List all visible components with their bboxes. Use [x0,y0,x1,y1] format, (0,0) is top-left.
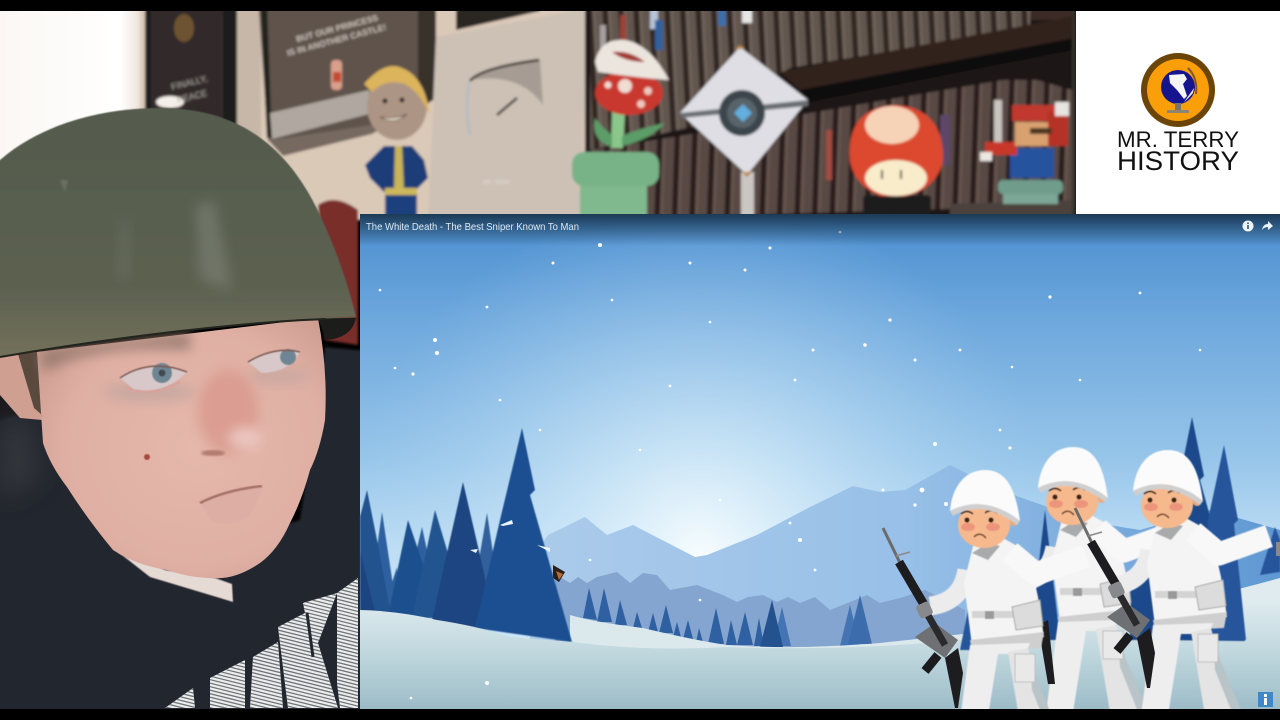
game cartridge shelf [585,0,1076,220]
left poster frame [145,0,237,126]
mario princess poster frame: BUT OUR PRINCESS [295,12,379,44]
top black bar [0,0,1280,11]
face [37,318,326,578]
glowing mushroom lamp [850,105,943,220]
mario princess poster frame: IS IN ANOTHER CASTLE! [286,22,387,58]
soldier two [1018,447,1174,712]
neck and collar [113,548,233,602]
pixel mario figure [980,102,1069,204]
soldier three [1113,450,1269,715]
mario princess poster frame [258,0,436,156]
soldier one rifle [883,528,963,708]
nose tip highlight [228,427,262,449]
small mid trees [583,588,872,647]
vault boy bobblehead [364,66,430,220]
mr terry history logo [1117,53,1239,176]
silver play button plaque: MR. TERRY [483,180,511,186]
animated video panel [360,214,1280,720]
shirt slit [307,613,313,657]
destiny ghost figure [680,45,808,220]
brow shadow [40,332,190,372]
sky [360,214,1280,709]
snowflakes [379,231,1201,699]
snow back hill [570,615,1000,660]
nostril shadow [201,450,225,456]
icon: info circle [1242,220,1254,232]
room background photo [0,0,1076,345]
ear and hair [0,350,42,420]
left poster frame: PEACE [176,88,208,105]
tree snow flecks [470,520,550,553]
shirt shoulder sheen [0,418,40,500]
mouth [200,486,262,524]
right forest [960,417,1280,650]
distant mountains [530,465,1280,660]
hidden sniper helmet [553,565,565,582]
left forest [360,428,572,642]
left eye [120,363,187,391]
white logo panel [1076,11,1280,214]
top video title gradient [360,214,1280,246]
piranha plant plush [572,40,669,220]
jagged distant treeline [555,572,965,650]
soldier one [930,470,1086,720]
person wearing helmet [0,108,390,720]
icon: info card badge [1258,692,1273,707]
dark background behind person [0,340,40,440]
silver play button plaque [428,8,587,220]
soldier three outstretched glove [1276,542,1280,556]
eye socket shadows [104,382,196,402]
bright window and wall [0,0,592,220]
right eye socket shadow [248,368,308,384]
nose [198,370,258,454]
icon: share arrow [1262,221,1273,230]
mr terry history logo: MR. TERRY [1117,127,1239,152]
soldier two rifle stock [1038,620,1055,684]
video title: The White Death - The Best Sniper Known To Man [366,221,579,233]
red blanket behind person [318,200,358,345]
soldier three rifle [1075,508,1155,688]
left poster frame: FINALLY, [170,73,209,92]
horizon glow [360,214,1280,709]
mr terry history logo: HISTORY [1117,146,1239,176]
black shirt [0,347,390,720]
snow ground [360,578,1280,709]
shirt graphic stripes [165,578,358,708]
army helmet [0,108,356,360]
bottom black bar [0,709,1280,720]
mole [144,454,150,460]
right eye [248,349,300,373]
